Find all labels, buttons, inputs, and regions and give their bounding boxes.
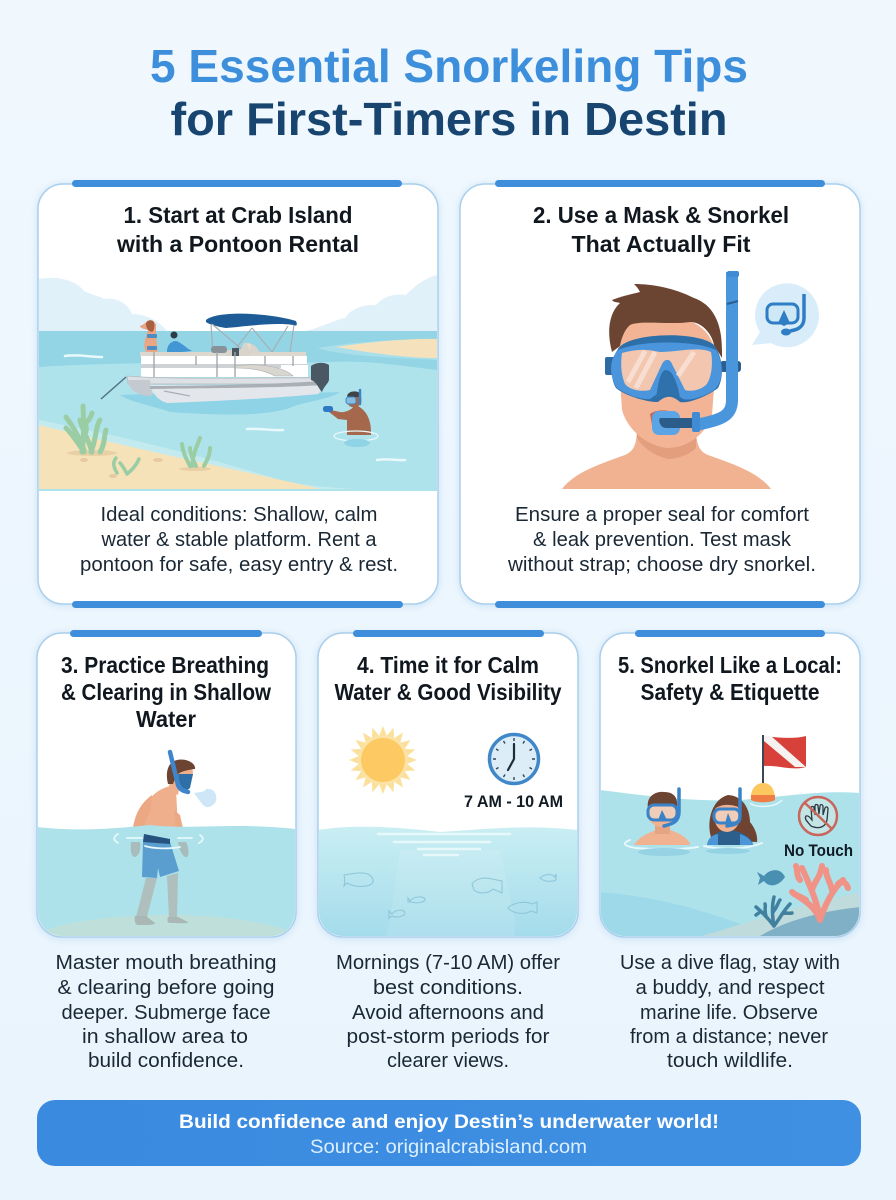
pink coral — [792, 866, 848, 920]
illustration: pontoon boat at Crab Island — [39, 275, 437, 491]
text: tip 4: post-storm periods for — [346, 1026, 550, 1048]
illustration: divers, dive flag and coral — [600, 735, 862, 940]
icon: speech bubble with mask — [752, 283, 819, 347]
text: tip 5: marine life. Observe — [640, 1002, 818, 1024]
seaweed — [66, 406, 210, 474]
anchor rope — [101, 377, 126, 399]
text: tip 1: pontoon for safe, easy entry & rest. — [80, 554, 398, 576]
heading: tip 5: Safety & Etiquette — [640, 679, 820, 705]
heading: tip 4 — [334, 652, 562, 705]
ripples — [114, 834, 203, 848]
text: tip 5: touch wildlife. — [667, 1050, 793, 1072]
heading: tip 3 — [61, 652, 271, 732]
no touch sign — [799, 797, 837, 835]
railing — [141, 356, 307, 364]
text: tip 5: a buddy, and respect — [636, 977, 825, 999]
text: tip 1 — [80, 504, 398, 576]
heading: tip 2 — [533, 202, 789, 257]
fish — [757, 870, 785, 885]
water shadow — [120, 392, 340, 414]
text: tip 4 — [336, 952, 560, 1072]
text: tip 3: & clearing before going — [58, 977, 274, 999]
illustration: man wearing mask and snorkel — [562, 271, 819, 489]
blue coral — [756, 897, 792, 926]
text: tip 5: Use a dive flag, stay with — [620, 952, 840, 974]
text: tip 5: from a distance; never — [630, 1026, 828, 1048]
heading: tip 4: 4. Time it for Calm — [357, 652, 539, 678]
mask — [605, 357, 615, 375]
title: for First-Timers in Destin — [170, 93, 728, 145]
heading: tip 2: That Actually Fit — [572, 231, 751, 257]
text: tip 5 — [620, 952, 840, 1072]
panel: tip 1 Crab Island — [38, 180, 438, 608]
no touch label: No Touch — [784, 841, 853, 860]
text: tip 3: build confidence. — [88, 1050, 244, 1072]
footer banner: Build confidence and enjoy Destin’s underwater world! — [179, 1112, 719, 1133]
text: tip 2: without strap; choose dry snorkel. — [507, 554, 816, 576]
text: tip 4: Avoid afternoons and — [352, 1002, 544, 1024]
heading: tip 4: Water & Good Visibility — [334, 679, 562, 705]
text: tip 4: best conditions. — [373, 977, 523, 999]
water — [37, 825, 296, 940]
buoy and dive flag — [762, 735, 764, 785]
title: 5 Essential Snorkeling Tips — [150, 40, 748, 92]
outboard motor — [311, 363, 329, 392]
mouth and mouthpiece — [650, 410, 672, 425]
upper body — [144, 786, 178, 827]
illustration: man practising in shallow water — [37, 752, 296, 940]
text: tip 4: Mornings (7-10 AM) offer — [336, 952, 560, 974]
text: tip 3: deeper. Submerge face — [62, 1002, 270, 1024]
text: tip 4: clearer views. — [387, 1050, 509, 1072]
footer banner: Source: originalcrabisland.com — [310, 1137, 587, 1158]
heading: tip 2: 2. Use a Mask & Snorkel — [533, 202, 789, 228]
heading: tip 3: 3. Practice Breathing — [61, 652, 269, 678]
icon: sun — [349, 726, 417, 794]
text: tip 3 — [56, 952, 276, 1072]
surface ripples — [625, 840, 762, 849]
heading: tip 5: 5. Snorkel Like a Local: — [618, 652, 842, 678]
illustration: calm water with fish — [318, 827, 578, 940]
panel: tip 2 Mask and Snorkel — [460, 180, 860, 608]
snorkeler woman — [707, 789, 757, 845]
heading: tip 1: with a Pontoon Rental — [116, 231, 359, 257]
title — [150, 40, 748, 145]
snorkel tube — [696, 272, 732, 425]
icon: clock — [490, 734, 538, 784]
pontoons — [127, 376, 322, 384]
panel: tip 3 Breathing — [37, 630, 296, 1072]
text: tip 3: in shallow area to — [82, 1026, 248, 1048]
clock label: 7 AM - 10 AM — [464, 792, 563, 811]
boat console and seats — [140, 352, 306, 356]
text: tip 1: water & stable platform. Rent a — [100, 529, 377, 551]
shorts — [142, 842, 179, 878]
text: tip 1: Ideal conditions: Shallow, calm — [100, 504, 378, 526]
heading: tip 5 — [618, 652, 842, 705]
text: tip 3: Master mouth breathing — [56, 952, 276, 974]
submerged arms and legs — [131, 842, 140, 857]
people on deck — [140, 321, 158, 352]
snorkeler in water — [329, 405, 371, 435]
heading: tip 3: & Clearing in Shallow — [61, 679, 271, 705]
canopy — [206, 314, 297, 328]
panel: tip 4 Timing — [318, 630, 578, 1072]
heading: tip 1 — [116, 202, 359, 257]
heading: tip 1: 1. Start at Crab Island — [124, 202, 352, 228]
heading: tip 3: Water — [136, 706, 196, 732]
text: tip 2: Ensure a proper seal for comfort — [515, 504, 809, 526]
panel: tip 5 Safety — [600, 630, 862, 1072]
snorkeler man — [634, 789, 690, 845]
text: tip 2 — [507, 504, 816, 576]
footer banner — [37, 1100, 861, 1166]
text: tip 2: & leak prevention. Test mask — [533, 529, 792, 551]
